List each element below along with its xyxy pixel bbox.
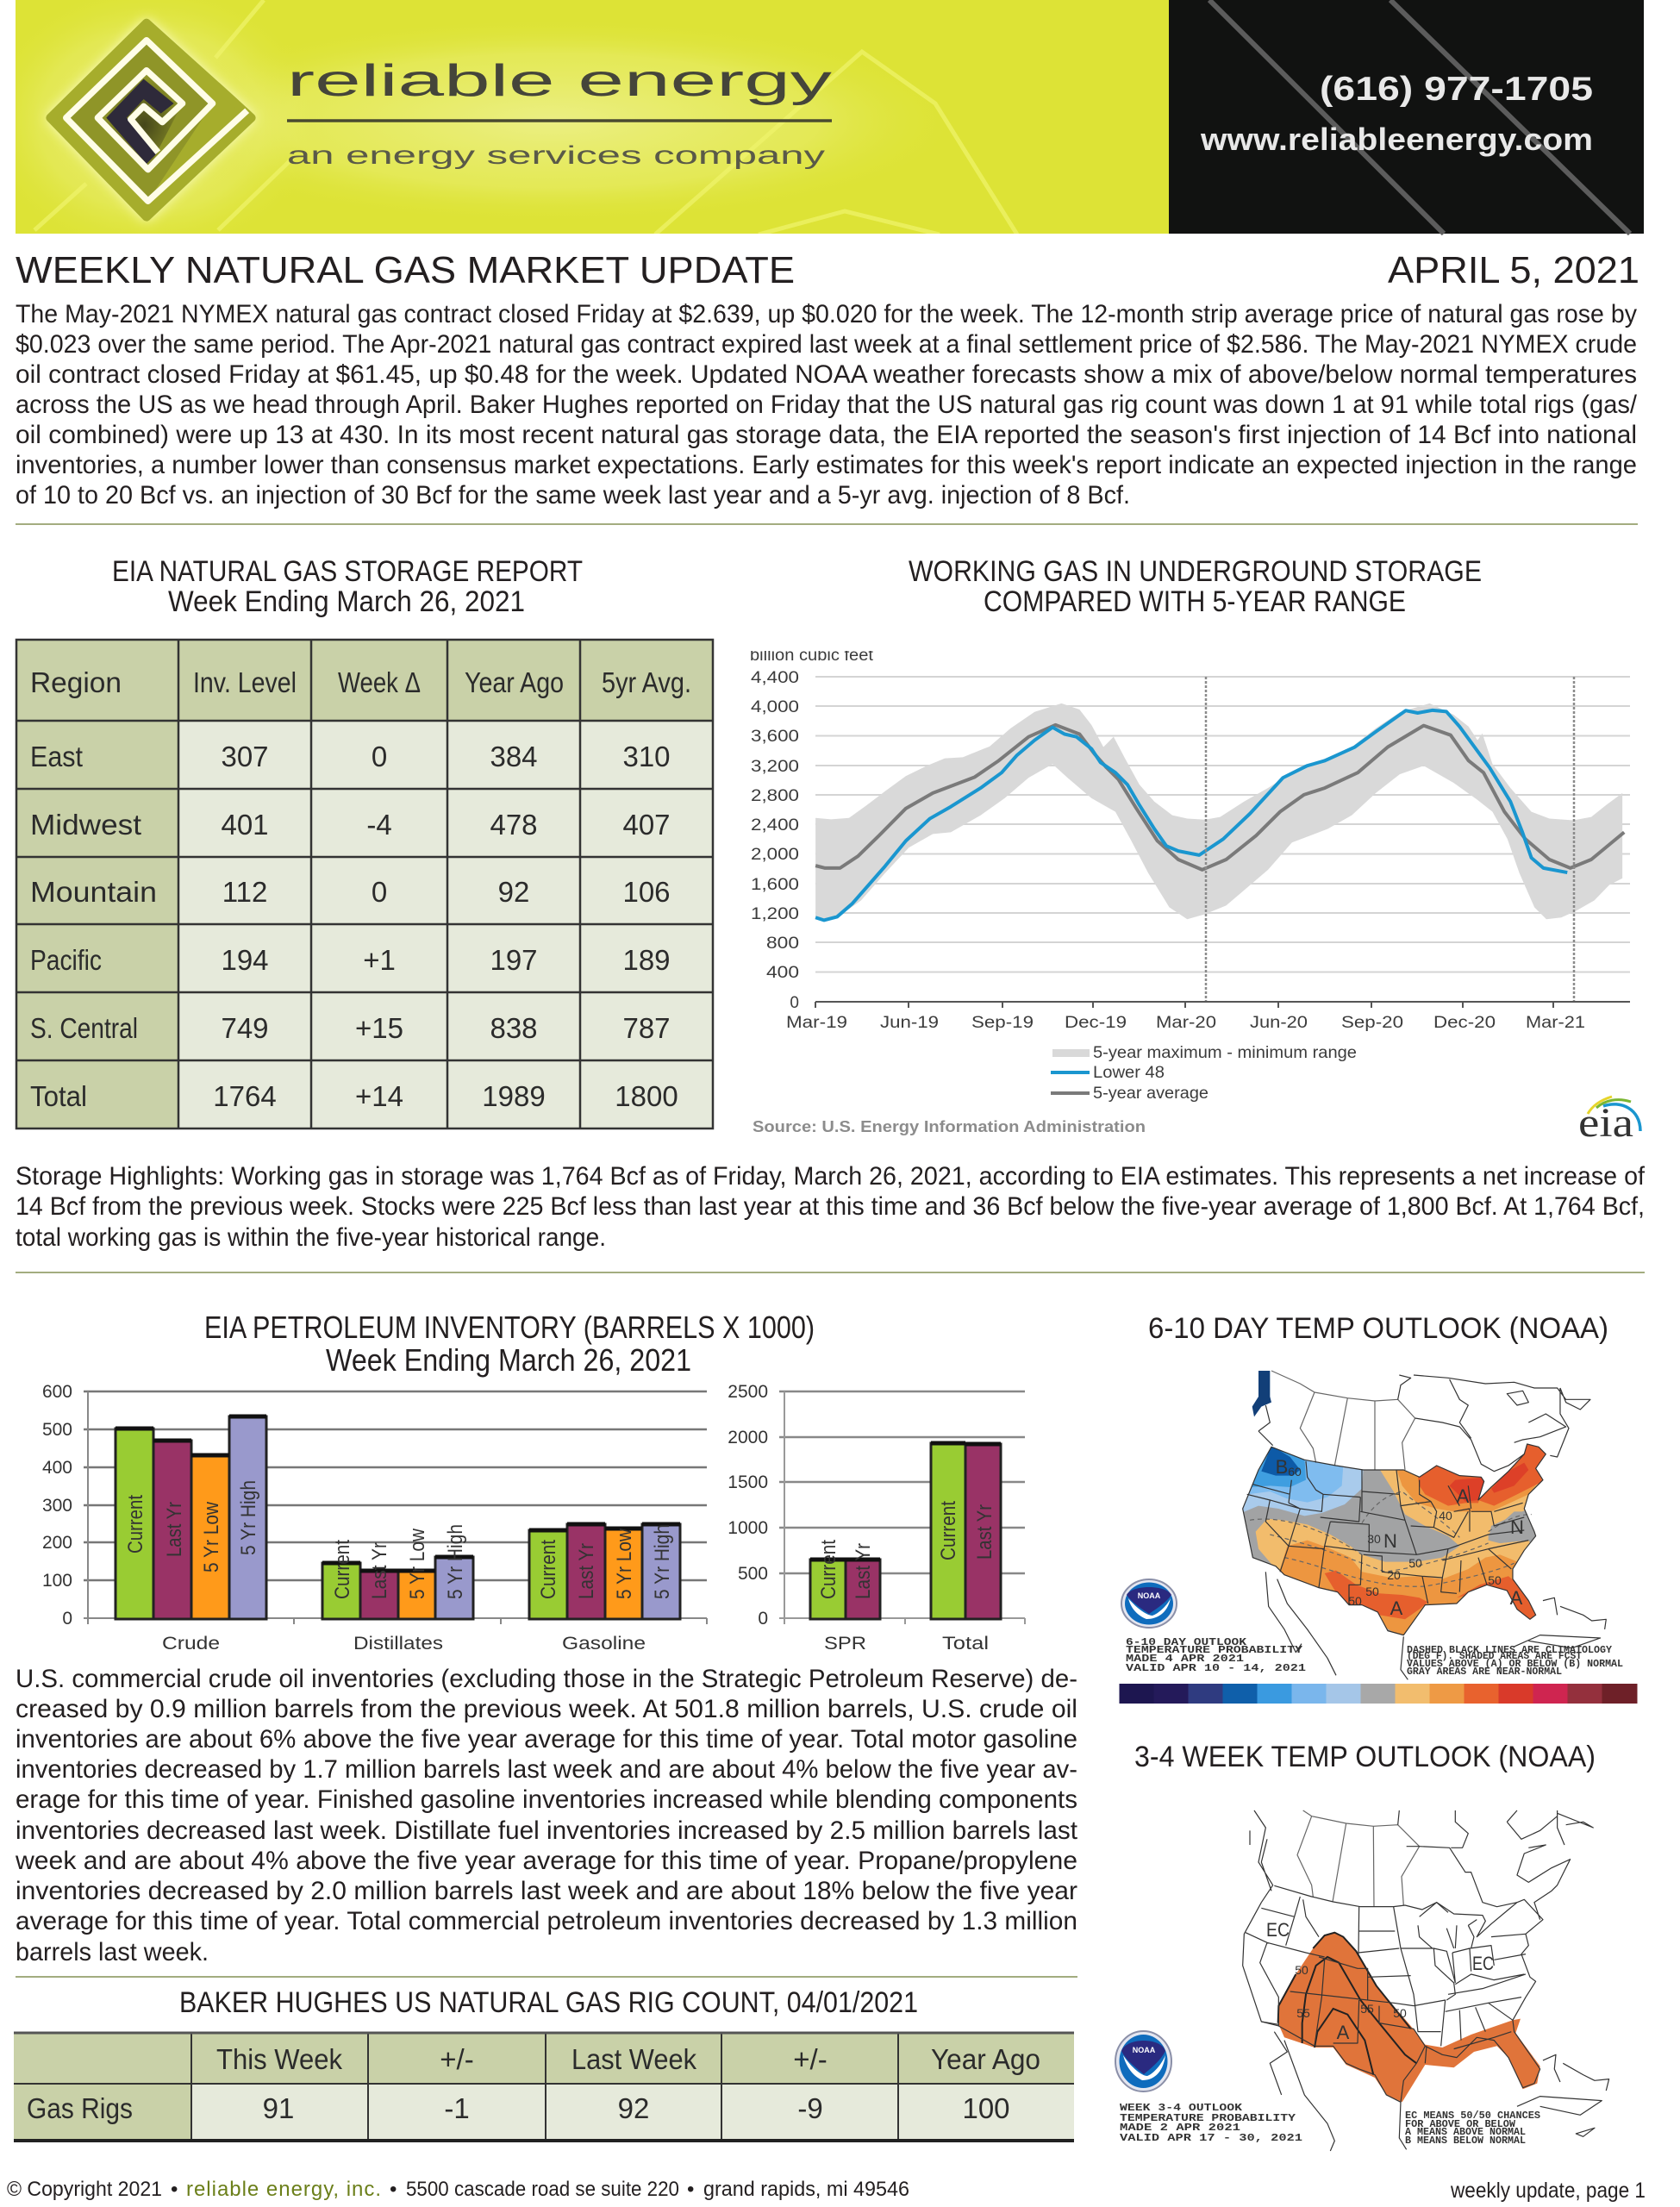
y axis labels: 500 bbox=[738, 1564, 768, 1584]
row: East: 384 bbox=[490, 741, 538, 772]
text block: petroleum summary: average for this time of year. Total commercial petroleum inventories decreased by 1.3 million bbox=[16, 1907, 1077, 1935]
map caption right: B MEANS BELOW NORMAL bbox=[1405, 2135, 1526, 2147]
x axis labels: Sep-19 bbox=[971, 1014, 1034, 1032]
line chart: working gas in storage bbox=[746, 643, 1640, 1146]
table header row: Year Ago bbox=[465, 666, 564, 698]
map labels: 20 bbox=[1387, 1568, 1401, 1582]
y axis unit: billion cubic feet bbox=[750, 647, 874, 665]
bar value labels: Last Yr bbox=[163, 1502, 186, 1557]
map labels: 50 bbox=[1393, 2006, 1407, 2020]
rig table header: This Week bbox=[216, 2043, 342, 2075]
y axis labels: 0 bbox=[790, 994, 799, 1012]
row: Midwest: 407 bbox=[622, 809, 671, 841]
row: Total: +14 bbox=[355, 1080, 403, 1112]
bars: SPR bbox=[810, 1560, 880, 1619]
text block: storage highlights: total working gas is within the five-year historical range. bbox=[16, 1223, 606, 1252]
y axis labels: 0 bbox=[62, 1609, 72, 1629]
text block: market summary: across the US as we head through April. Baker Hughes reported on Friday that the US natural gas rig count was down 1 at 91 while total rigs (gas/ bbox=[16, 391, 1638, 419]
map labels: EC bbox=[1266, 1919, 1290, 1941]
y axis labels: 0 bbox=[758, 1609, 768, 1629]
map labels: 55 bbox=[1360, 2002, 1374, 2016]
y axis labels: 4,400 bbox=[751, 669, 799, 687]
text block: petroleum summary: creased by 0.9 million barrels from the previous week. At 501.8 million barrels, U.S. crude oil bbox=[16, 1695, 1077, 1723]
text block: market summary: inventories, a number lower than consensus market expectations. Early estimates for this week's report indicate an expected injection in the range bbox=[16, 451, 1637, 479]
row: Mountain: Mountain bbox=[30, 876, 157, 908]
text block: petroleum summary: U.S. commercial crude oil inventories (excluding those in the Strategic Petroleum Reserve) de- bbox=[16, 1665, 1077, 1693]
bar value labels: 5 Yr Low bbox=[406, 1528, 429, 1599]
map labels: 60 bbox=[1288, 1465, 1302, 1479]
footer: © Copyright 2021 bbox=[7, 2178, 162, 2201]
Lower 48 line bbox=[815, 710, 1567, 920]
bar value labels: Last Yr bbox=[973, 1504, 996, 1560]
table header row: Week Δ bbox=[338, 666, 421, 698]
company name: reliable energy bbox=[287, 56, 832, 106]
x axis labels: Dec-19 bbox=[1065, 1014, 1127, 1032]
icon: eia logo: eia bbox=[1578, 1100, 1633, 1146]
text block: petroleum summary: erage for this time of year. Finished gasoline inventories increased while blending components bbox=[16, 1785, 1077, 1814]
bar value labels: Current bbox=[537, 1540, 560, 1599]
row: S. Central: 749 bbox=[221, 1012, 269, 1044]
category labels: Gasoline bbox=[562, 1634, 646, 1654]
category labels bbox=[162, 1634, 646, 1654]
row: Midwest: -4 bbox=[366, 809, 392, 841]
footer: reliable energy, inc. bbox=[186, 2178, 381, 2201]
row: East bbox=[30, 741, 671, 772]
map labels bbox=[1276, 1456, 1524, 1619]
y axis labels: 500 bbox=[42, 1420, 72, 1440]
map labels: 50 bbox=[1408, 1556, 1422, 1570]
bar value labels: Last Yr bbox=[575, 1543, 598, 1599]
row: Pacific: 194 bbox=[221, 944, 269, 976]
x axis labels: Jun-19 bbox=[880, 1014, 939, 1032]
x axis labels: Mar-20 bbox=[1156, 1014, 1216, 1032]
row: Pacific: 189 bbox=[622, 944, 671, 976]
map caption left: TEMPERATURE PROBABILITY bbox=[1120, 2112, 1296, 2124]
y axis labels: 400 bbox=[766, 964, 799, 982]
row: S. Central: +15 bbox=[355, 1012, 403, 1044]
y axis labels bbox=[42, 1382, 72, 1629]
heading: working gas chart: COMPARED WITH 5-YEAR RANGE bbox=[984, 585, 1406, 618]
y axis labels: 400 bbox=[42, 1458, 72, 1478]
row: Mountain: 0 bbox=[372, 876, 387, 908]
icon: NOAA logo: NOAA bbox=[1133, 2046, 1156, 2054]
row: Mountain: 106 bbox=[622, 876, 671, 908]
map labels: 30 bbox=[1367, 1532, 1381, 1546]
map labels: 40 bbox=[1439, 1509, 1452, 1522]
black contact panel: www.reliableenergy.com bbox=[1200, 122, 1593, 157]
heading: storage report: Week Ending March 26, 2021 bbox=[168, 585, 525, 618]
y axis labels: 200 bbox=[42, 1533, 72, 1553]
bar value labels: Current bbox=[124, 1495, 147, 1554]
rig table row: 100 bbox=[962, 2092, 1010, 2124]
map boundary lines bbox=[1271, 1371, 1415, 1470]
y axis labels: 1500 bbox=[728, 1472, 768, 1492]
text block: market summary: of 10 to 20 Bcf vs. an injection of 30 Bcf for the same week last year and a 5-yr avg. injection of 8 Bcf. bbox=[16, 481, 1130, 510]
map caption left: WEEK 3-4 OUTLOOK bbox=[1120, 2102, 1243, 2114]
map caption left: VALID APR 10 - 14, 2021 bbox=[1126, 1662, 1306, 1674]
black contact panel bbox=[1169, 0, 1644, 234]
x axis labels: Mar-19 bbox=[786, 1014, 847, 1032]
y axis labels: 4,000 bbox=[751, 698, 799, 716]
y axis labels: 800 bbox=[766, 935, 799, 953]
map labels: A bbox=[1337, 2022, 1350, 2043]
text block: petroleum summary: week and are about 4% above the five year average for this time of year. Propane/propylene bbox=[15, 1847, 1077, 1875]
title: WEEKLY NATURAL GAS MARKET UPDATE bbox=[16, 249, 795, 291]
legend: Lower 48 bbox=[1093, 1064, 1165, 1082]
x axis labels: Mar-21 bbox=[1526, 1014, 1585, 1032]
row: East: 307 bbox=[221, 741, 269, 772]
footer: • bbox=[687, 2178, 694, 2201]
row: S. Central: 787 bbox=[622, 1012, 671, 1044]
bar chart: SPR and total bbox=[728, 1382, 1025, 1654]
map caption left: 6-10 DAY OUTLOOK bbox=[1126, 1636, 1247, 1648]
map labels: A bbox=[1457, 1485, 1470, 1507]
map caption right bbox=[1405, 2110, 1540, 2147]
map labels: 50 bbox=[1488, 1573, 1502, 1587]
probability contours bbox=[1278, 1933, 1416, 2075]
row: East: 0 bbox=[372, 741, 387, 772]
row: Midwest: Midwest bbox=[30, 809, 141, 841]
y axis labels: 3,600 bbox=[751, 728, 799, 746]
map caption right: VALUES ABOVE (A) OR BELOW (B) NORMAL bbox=[1407, 1658, 1623, 1670]
color scale bar bbox=[1119, 1684, 1638, 1704]
rig table row: -9 bbox=[797, 2092, 823, 2124]
table: rig count bbox=[14, 2033, 1074, 2141]
y axis labels: 300 bbox=[42, 1496, 72, 1516]
map caption right: A MEANS ABOVE NORMAL bbox=[1405, 2126, 1526, 2138]
icon: NOAA logo: NOAA bbox=[1138, 1591, 1161, 1600]
bars: distillates bbox=[322, 1557, 473, 1619]
legend: 5-year average bbox=[1093, 1085, 1208, 1103]
heading: 6-10 day outlook: 6-10 DAY TEMP OUTLOOK (NOAA) bbox=[1148, 1312, 1608, 1345]
rig table header: Last Week bbox=[571, 2043, 696, 2075]
row: Pacific: Pacific bbox=[30, 944, 102, 976]
map labels: A bbox=[1510, 1587, 1523, 1609]
map caption right: FOR ABOVE OR BELOW bbox=[1405, 2118, 1516, 2130]
above-normal region bbox=[1278, 1933, 1540, 2102]
table header row bbox=[30, 666, 691, 698]
page number: weekly update, page 1 bbox=[1450, 2179, 1646, 2203]
5-year range band bbox=[815, 703, 1622, 919]
row: Pacific bbox=[30, 944, 671, 976]
map caption left: TEMPERATURE PROBABILITY bbox=[1126, 1644, 1303, 1656]
text block: market summary: oil contract closed Friday at $61.45, up $0.48 for the week. Updated NOAA weather forecasts show a mix of above/below normal temperatures bbox=[16, 360, 1637, 389]
map caption right: (DEG F). SHADED AREAS ARE FCST bbox=[1407, 1650, 1582, 1662]
y axis labels: 1,200 bbox=[751, 905, 799, 923]
row: Mountain: 92 bbox=[498, 876, 529, 908]
map caption right: DASHED BLACK LINES ARE CLIMATOLOGY bbox=[1407, 1644, 1613, 1656]
bars: total bbox=[931, 1443, 1001, 1619]
map caption right: GRAY AREAS ARE NEAR-NORMAL bbox=[1407, 1666, 1562, 1678]
map labels: 55 bbox=[1296, 2006, 1310, 2020]
row: S. Central: 838 bbox=[490, 1012, 538, 1044]
text block: market summary: oil combined) were up 13 at 430. In its most recent natural gas storage data, the EIA reported the season's first injection of 14 Bcf into national bbox=[16, 421, 1637, 449]
category labels: Crude bbox=[162, 1634, 220, 1654]
map labels: B bbox=[1276, 1456, 1288, 1478]
row: Total: 1989 bbox=[482, 1080, 546, 1112]
rig table row bbox=[27, 2092, 1010, 2124]
table header row: Inv. Level bbox=[193, 666, 297, 698]
map caption left: MADE 2 APR 2021 bbox=[1120, 2122, 1240, 2134]
rig table row: 92 bbox=[618, 2092, 649, 2124]
table header row: Region bbox=[30, 666, 122, 698]
company tagline: an energy services company bbox=[287, 141, 825, 170]
map: 3-4 week temperature outlook bbox=[1115, 1810, 1609, 2151]
y axis labels: 2,000 bbox=[751, 846, 799, 864]
footer bbox=[7, 2178, 909, 2201]
x axis labels: Jun-20 bbox=[1250, 1014, 1308, 1032]
row: S. Central bbox=[30, 1012, 671, 1044]
row: East: East bbox=[30, 741, 83, 772]
row: Midwest: 401 bbox=[221, 809, 269, 841]
x axis labels: Dec-20 bbox=[1433, 1014, 1496, 1032]
text block: market summary bbox=[16, 300, 1638, 510]
date: APRIL 5, 2021 bbox=[1388, 249, 1639, 291]
yellow header panel bbox=[16, 0, 1169, 234]
row: Pacific: +1 bbox=[363, 944, 396, 976]
text block: petroleum summary: inventories decreased last week. Distillate fuel inventories increased by 2.5 million barrels last bbox=[16, 1816, 1078, 1845]
bar value labels: 5 Yr High bbox=[651, 1524, 674, 1599]
category labels: Total bbox=[942, 1634, 989, 1654]
footer: • bbox=[390, 2178, 397, 2201]
text block: market summary: $0.023 over the same period. The Apr-2021 natural gas contract expired last week at a final settlement price of $2.586. The May-2021 NYMEX crude bbox=[16, 330, 1637, 359]
northern coast dark patch bbox=[1252, 1371, 1271, 1416]
text block: storage highlights: Storage Highlights: Working gas in storage was 1,764 Bcf as of Friday, March 26, 2021, according to EIA estimates. This represents a net increase of bbox=[16, 1162, 1646, 1191]
y axis labels bbox=[728, 1382, 768, 1629]
temperature regions bbox=[1241, 1440, 1552, 1641]
y axis labels: 1,600 bbox=[751, 876, 799, 894]
icon: reliable energy spiral logo bbox=[46, 19, 256, 222]
table header row: 5yr Avg. bbox=[602, 666, 691, 698]
bar value labels: Current bbox=[937, 1501, 960, 1560]
heading: 3-4 week outlook: 3-4 WEEK TEMP OUTLOOK (NOAA) bbox=[1134, 1741, 1596, 1773]
text block: petroleum summary: inventories decreased by 2.0 million barrels last week and are about 18% below the five year bbox=[16, 1877, 1077, 1905]
bars: gasoline bbox=[529, 1524, 680, 1619]
category labels: SPR bbox=[824, 1634, 866, 1654]
row: Mountain bbox=[30, 876, 671, 908]
heading: petroleum inventory: EIA PETROLEUM INVENTORY (BARRELS X 1000) bbox=[204, 1310, 815, 1345]
footer: grand rapids, mi 49546 bbox=[703, 2178, 909, 2201]
dashed climatology contours bbox=[1250, 1491, 1532, 1586]
rig table header: +/- bbox=[793, 2043, 828, 2075]
map labels: A bbox=[1390, 1597, 1403, 1619]
row: Pacific: 197 bbox=[490, 944, 538, 976]
heading: working gas chart: WORKING GAS IN UNDERGROUND STORAGE bbox=[909, 555, 1482, 588]
x axis labels bbox=[786, 1014, 1585, 1032]
bar value labels: 5 Yr High bbox=[444, 1524, 467, 1599]
map caption left: VALID APR 17 - 30, 2021 bbox=[1120, 2132, 1302, 2144]
text block: storage highlights: 14 Bcf from the previous week. Stocks were 225 Bcf less than last year at this time and 36 Bcf below the five-year average of 1,800 Bcf. At 1,764 Bcf, bbox=[16, 1192, 1645, 1221]
icon: NOAA logo bbox=[1121, 1579, 1177, 1628]
map: 6-10 day temperature outlook bbox=[1119, 1371, 1638, 1704]
map caption left bbox=[1120, 2102, 1302, 2144]
row: Total bbox=[30, 1080, 678, 1112]
bar value labels: 5 Yr High bbox=[237, 1480, 260, 1555]
map labels: N bbox=[1510, 1516, 1524, 1538]
bar value labels: 5 Yr Low bbox=[200, 1501, 223, 1572]
source note: Source: U.S. Energy Information Administration bbox=[753, 1118, 1146, 1135]
table: storage report bbox=[16, 640, 713, 1129]
y axis labels: 3,200 bbox=[751, 758, 799, 776]
y axis labels: 2500 bbox=[728, 1382, 768, 1402]
x axis labels: Sep-20 bbox=[1341, 1014, 1403, 1032]
rig table row: Gas Rigs bbox=[27, 2092, 133, 2124]
map caption left: MADE 4 APR 2021 bbox=[1126, 1653, 1244, 1665]
text block: petroleum summary bbox=[15, 1665, 1078, 1966]
legend bbox=[1051, 1044, 1357, 1103]
header banner bbox=[0, 0, 1644, 259]
bar chart: crude, distillates, gasoline bbox=[42, 1382, 707, 1654]
heading: storage report bbox=[112, 555, 583, 618]
category labels: Distillates bbox=[353, 1634, 443, 1654]
row: Mountain: 112 bbox=[222, 876, 267, 908]
text block: market summary: The May-2021 NYMEX natural gas contract closed Friday at $2.639, up $0.020 for the week. The 12-month strip average price of natural gas rose by bbox=[16, 300, 1637, 328]
heading: working gas chart bbox=[909, 555, 1482, 618]
row: Total: Total bbox=[30, 1080, 87, 1112]
bar value labels: Current bbox=[817, 1540, 840, 1599]
legend: 5-year maximum - minimum range bbox=[1093, 1044, 1357, 1062]
text block: petroleum summary: inventories decreased by 1.7 million barrels last week and are about 4% below the five year av- bbox=[16, 1755, 1077, 1784]
bar value labels: Last Yr bbox=[852, 1543, 875, 1599]
row: Midwest: 478 bbox=[490, 809, 538, 841]
map caption left bbox=[1126, 1636, 1306, 1674]
y axis labels: 1000 bbox=[728, 1518, 768, 1538]
row: Midwest bbox=[30, 809, 671, 841]
category labels bbox=[824, 1634, 989, 1654]
y axis labels: 100 bbox=[42, 1571, 72, 1591]
bar value labels bbox=[124, 1480, 674, 1599]
icon: NOAA logo bbox=[1115, 2031, 1171, 2091]
5-year average line bbox=[815, 725, 1624, 870]
row: Total: 1764 bbox=[213, 1080, 277, 1112]
row: S. Central: S. Central bbox=[30, 1012, 138, 1044]
y axis labels: 2000 bbox=[728, 1428, 768, 1447]
y axis labels: 600 bbox=[42, 1382, 72, 1402]
rig table row: -1 bbox=[444, 2092, 470, 2124]
text block: petroleum summary: inventories are about 6% above the five year average for this time of year. Total motor gasoline bbox=[16, 1725, 1077, 1754]
rig table row: 91 bbox=[263, 2092, 294, 2124]
black contact panel: (616) 977-1705 bbox=[1320, 71, 1593, 108]
heading: petroleum inventory bbox=[204, 1310, 815, 1378]
heading: rig count: BAKER HUGHES US NATURAL GAS RIG COUNT, 04/01/2021 bbox=[179, 1986, 918, 2019]
bars: crude bbox=[116, 1416, 266, 1619]
bar value labels: 5 Yr Low bbox=[613, 1528, 636, 1599]
map labels: N bbox=[1383, 1530, 1397, 1552]
heading: storage report: EIA NATURAL GAS STORAGE REPORT bbox=[112, 555, 583, 588]
footer: • bbox=[171, 2178, 178, 2201]
rig table header: +/- bbox=[440, 2043, 474, 2075]
map labels: EC bbox=[1472, 1953, 1494, 1974]
text block: petroleum summary: barrels last week. bbox=[16, 1938, 209, 1966]
footer: 5500 cascade road se suite 220 bbox=[406, 2178, 679, 2201]
map boundary lines bbox=[1297, 1810, 1420, 1907]
rig table header bbox=[216, 2043, 1040, 2075]
row: East: 310 bbox=[622, 741, 671, 772]
map caption right: EC MEANS 50/50 CHANCES bbox=[1405, 2110, 1540, 2122]
map labels: 50 bbox=[1348, 1594, 1362, 1608]
row: Total: 1800 bbox=[615, 1080, 678, 1112]
map labels: 50 bbox=[1295, 1963, 1308, 1977]
rig table header: Year Ago bbox=[931, 2043, 1040, 2075]
y axis labels: 2,800 bbox=[751, 787, 799, 805]
map labels: 50 bbox=[1365, 1585, 1379, 1598]
bar value labels: Current bbox=[331, 1540, 354, 1599]
map caption right bbox=[1407, 1644, 1623, 1678]
map labels bbox=[1266, 1919, 1494, 2043]
y axis labels bbox=[751, 669, 799, 1012]
bar value labels: Last Yr bbox=[368, 1542, 391, 1599]
bar value labels bbox=[817, 1501, 996, 1599]
heading: petroleum inventory: Week Ending March 26, 2021 bbox=[326, 1342, 691, 1378]
text block: storage highlights bbox=[16, 1162, 1646, 1252]
y axis labels: 2,400 bbox=[751, 816, 799, 835]
